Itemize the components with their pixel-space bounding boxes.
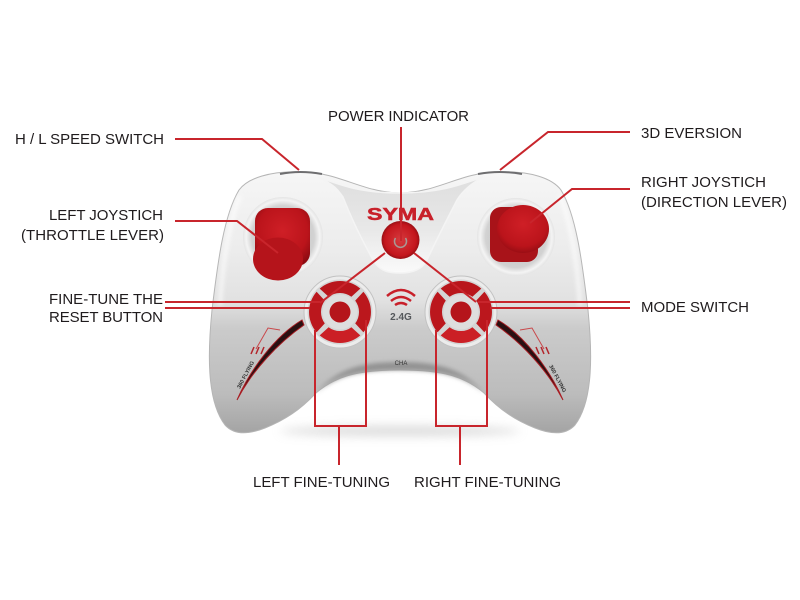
leader line: H/L speed switch xyxy=(175,139,299,170)
label: mode switch: MODE SWITCH xyxy=(641,299,749,316)
label: left joystick: LEFT JOYSTICH xyxy=(49,207,163,224)
controller body xyxy=(209,172,591,433)
leader line: left joystick xyxy=(175,221,278,253)
top bumpers xyxy=(280,172,522,174)
lower edge shading xyxy=(316,362,484,393)
right stripe: 360 FLYING xyxy=(547,364,567,394)
side highlights xyxy=(220,196,580,305)
wireless icon xyxy=(387,290,415,305)
controller xyxy=(209,172,591,433)
leader lines: mode switch xyxy=(478,302,630,308)
label: left fine-tuning: LEFT FINE-TUNING xyxy=(253,474,390,491)
label: fine-tune reset button: FINE-TUNE THE xyxy=(49,291,163,308)
left stripe xyxy=(236,320,304,400)
leader lines: fine-tune reset xyxy=(165,302,320,308)
label: left joystick: (THROTTLE LEVER) xyxy=(21,227,164,244)
label: H / L speed switch: H / L SPEED SWITCH xyxy=(15,131,164,148)
label: fine-tune reset button: RESET BUTTON xyxy=(49,309,163,326)
logo: SYMA: SYMA xyxy=(367,204,434,224)
leader line: power to right d-pad xyxy=(414,253,476,302)
leader line: right joystick xyxy=(530,189,630,223)
left stripe: 360 FLYING xyxy=(236,360,256,390)
bracket: right fine-tuning xyxy=(436,320,487,465)
bracket: left fine-tuning xyxy=(315,320,366,465)
left joystick xyxy=(243,197,323,280)
right d-pad xyxy=(425,276,497,348)
label: left joystick xyxy=(21,207,164,244)
leader line: power indicator xyxy=(400,127,402,241)
right joystick xyxy=(477,198,555,276)
2.4G label: 2.4G xyxy=(390,312,412,323)
label: 3D eversion: 3D EVERSION xyxy=(641,125,742,142)
CHA label: CHA xyxy=(395,361,407,367)
label: right joystick: (DIRECTION LEVER) xyxy=(641,194,787,211)
ground shadow xyxy=(280,426,520,436)
leader line: power to left d-pad xyxy=(320,253,385,303)
leader line: 3D eversion xyxy=(500,132,630,170)
label: right joystick xyxy=(641,174,787,211)
centre panel xyxy=(318,177,483,273)
label: power indicator: POWER INDICATOR xyxy=(328,108,469,125)
power button xyxy=(382,221,420,259)
label: fine-tune reset button xyxy=(49,291,163,326)
label: right joystick: RIGHT JOYSTICH xyxy=(641,174,766,191)
left d-pad xyxy=(304,276,376,348)
label: right fine-tuning: RIGHT FINE-TUNING xyxy=(414,474,561,491)
right stripe xyxy=(496,320,567,400)
